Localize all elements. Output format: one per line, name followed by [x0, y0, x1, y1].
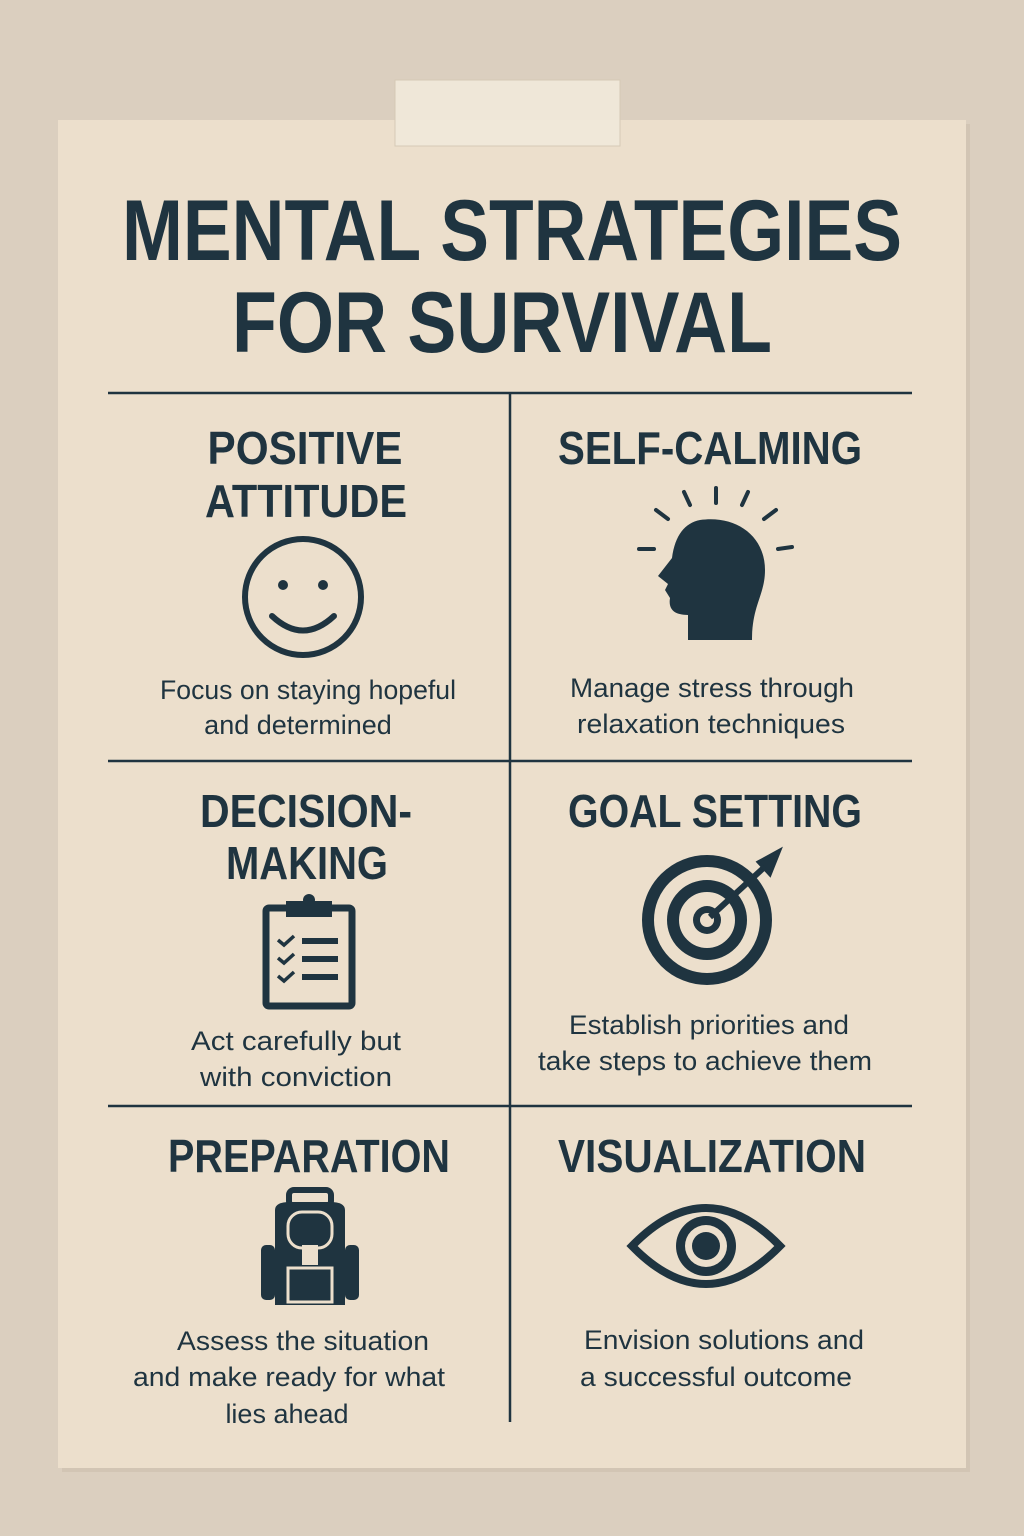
panel: preparation: Assess the situation [177, 1326, 429, 1356]
panel: visualization: a successful outcome [580, 1362, 852, 1392]
title: FOR SURVIVAL [232, 275, 772, 371]
panel: decision-making: with conviction [199, 1062, 392, 1092]
icon: head [639, 488, 792, 640]
tape [395, 80, 620, 146]
panel: positive attitude: Focus on staying hopeful [160, 675, 456, 705]
panel: self-calming: relaxation techniques [577, 709, 845, 739]
panel: positive attitude: POSITIVE [208, 422, 402, 474]
icon: target [648, 850, 780, 979]
panel: preparation: lies ahead [225, 1399, 349, 1429]
panel: visualization [558, 1130, 866, 1392]
panel: goal setting: GOAL SETTING [568, 785, 862, 837]
panel: decision-making: DECISION- [200, 785, 412, 837]
panel: self-calming: SELF-CALMING [558, 422, 862, 474]
icon: smiley [245, 539, 361, 655]
panel: goal setting: Establish priorities and [569, 1010, 849, 1040]
panel: self-calming: Manage stress through [570, 673, 854, 703]
panel: visualization: Envision solutions and [584, 1325, 864, 1355]
title [122, 183, 902, 371]
panel: positive attitude [160, 422, 456, 740]
paper sheet [58, 120, 970, 1472]
panel: positive attitude: and determined [204, 710, 392, 740]
panel: preparation: PREPARATION [168, 1130, 450, 1182]
panel: positive attitude: ATTITUDE [205, 475, 407, 527]
panel: goal setting: take steps to achieve them [538, 1046, 872, 1076]
panel: decision-making: MAKING [226, 837, 388, 889]
panel: decision-making [191, 785, 412, 1092]
icon: eye [632, 1208, 780, 1284]
panel: decision-making: Act carefully but [191, 1026, 402, 1056]
icon: clipboard [266, 894, 352, 1006]
panel: goal setting [538, 785, 872, 1076]
icon: backpack [261, 1190, 359, 1305]
title: MENTAL STRATEGIES [122, 183, 902, 279]
panel: visualization: VISUALIZATION [558, 1130, 866, 1182]
panel: self-calming [558, 422, 862, 739]
panel: preparation [133, 1130, 450, 1429]
panel: preparation: and make ready for what [133, 1362, 446, 1392]
